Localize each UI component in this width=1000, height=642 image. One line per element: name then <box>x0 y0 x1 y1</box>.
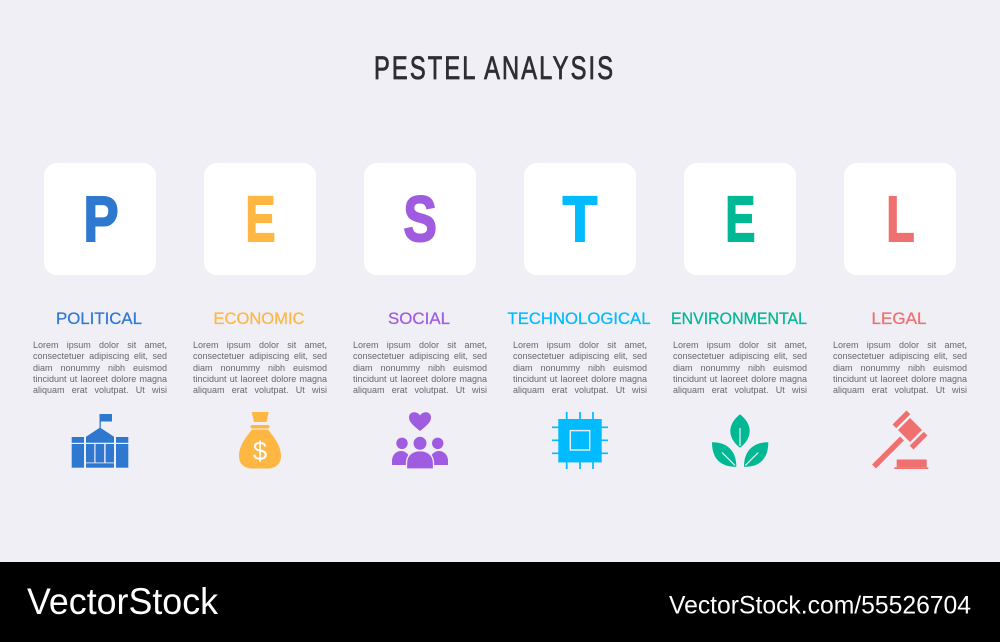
text block: social: Lorem ipsum dolor sit amet, <box>353 340 487 350</box>
heading: economic: ECONOMIC <box>214 309 304 328</box>
text block: legal: consectetuer adipiscing elit, sed <box>833 351 967 361</box>
footer logo: VectorStock <box>27 580 218 622</box>
icon: people with heart <box>392 412 448 468</box>
letter card: P: P <box>84 184 119 255</box>
letter card: E <box>684 163 796 275</box>
letter card: E: E <box>246 183 275 255</box>
text block: social: tincidunt ut laoreet dolore magna <box>353 374 487 384</box>
text block: technological: tincidunt ut laoreet dolore magna <box>513 374 647 384</box>
text block: political: aliquam erat volutpat. Ut wisi <box>33 385 167 395</box>
text block: environmental: aliquam erat volutpat. Ut wisi <box>673 385 807 395</box>
title: PESTEL ANALYSIS <box>374 51 613 86</box>
text block: legal: Lorem ipsum dolor sit amet, <box>833 340 967 350</box>
text block: legal: aliquam erat volutpat. Ut wisi <box>833 385 967 395</box>
text block: political: diam nonummy nibh euismod <box>33 363 167 373</box>
text block: technological: consectetuer adipiscing elit, sed <box>513 351 647 361</box>
text block: social: consectetuer adipiscing elit, sed <box>353 351 487 361</box>
text block: social: diam nonummy nibh euismod <box>353 363 487 373</box>
letter card: T: T <box>563 183 597 255</box>
text block: environmental: diam nonummy nibh euismod <box>673 363 807 373</box>
text block: social <box>353 340 487 395</box>
footer bar <box>0 562 1000 642</box>
heading: environmental: ENVIRONMENTAL <box>671 309 807 328</box>
text block: economic: Lorem ipsum dolor sit amet, <box>193 340 327 350</box>
text block: technological: Lorem ipsum dolor sit amet, <box>513 340 647 350</box>
text block: political: tincidunt ut laoreet dolore magna <box>33 374 167 384</box>
letter card: L: L <box>886 184 915 255</box>
text block: technological: diam nonummy nibh euismod <box>513 363 647 373</box>
icon: leaves <box>712 414 768 467</box>
heading: political: POLITICAL <box>56 309 142 328</box>
heading: technological: TECHNOLOGICAL <box>508 309 650 328</box>
letter card: S <box>364 163 476 275</box>
panel: political <box>33 163 167 468</box>
text block: environmental: Lorem ipsum dolor sit amet, <box>673 340 807 350</box>
text block: economic: aliquam erat volutpat. Ut wisi <box>193 385 327 395</box>
icon: money bag <box>239 412 281 468</box>
text block: economic: diam nonummy nibh euismod <box>193 363 327 373</box>
text block: political: consectetuer adipiscing elit, sed <box>33 351 167 361</box>
text block: environmental: consectetuer adipiscing elit, sed <box>673 351 807 361</box>
text block: legal: diam nonummy nibh euismod <box>833 363 967 373</box>
text block: political: Lorem ipsum dolor sit amet, <box>33 340 167 350</box>
icon: money bag: $ <box>253 436 268 466</box>
text block: technological: aliquam erat volutpat. Ut wisi <box>513 385 647 395</box>
text block: technological <box>513 340 647 395</box>
text block: social: aliquam erat volutpat. Ut wisi <box>353 385 487 395</box>
heading: social: SOCIAL <box>388 309 450 328</box>
icon: microchip <box>552 412 608 469</box>
text block: environmental <box>673 340 807 395</box>
panel: technological <box>508 163 650 469</box>
text block: environmental: tincidunt ut laoreet dolore magna <box>673 374 807 384</box>
text block: political <box>33 340 167 395</box>
letter card: P <box>44 163 156 275</box>
panel: economic <box>193 163 327 468</box>
letter card: S: S <box>404 184 437 255</box>
icon: gavel <box>872 410 928 469</box>
text block: economic: tincidunt ut laoreet dolore magna <box>193 374 327 384</box>
letter card: E <box>204 163 316 275</box>
panel: environmental <box>671 163 807 467</box>
letter card: L <box>844 163 956 275</box>
icon: government building <box>72 414 128 468</box>
heading: legal: LEGAL <box>872 309 926 328</box>
text block: legal: tincidunt ut laoreet dolore magna <box>833 374 967 384</box>
letter card: T <box>524 163 636 275</box>
letter card: E: E <box>725 183 755 255</box>
footer url: VectorStock.com/55526704 <box>669 592 971 619</box>
panel: social <box>353 163 487 468</box>
text block: economic: consectetuer adipiscing elit, sed <box>193 351 327 361</box>
panel: legal <box>833 163 967 469</box>
text block: economic <box>193 340 327 395</box>
text block: legal <box>833 340 967 395</box>
